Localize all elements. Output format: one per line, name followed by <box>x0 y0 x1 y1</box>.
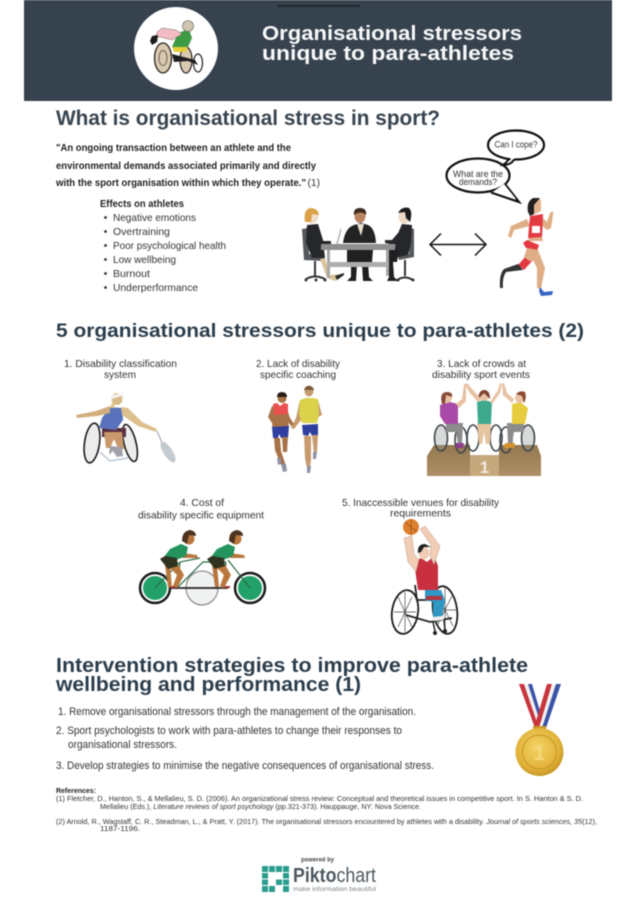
effects on athletes list: Underperformance <box>113 282 198 294</box>
label: 1. Disability classification <box>64 358 177 370</box>
stressor 1 <box>64 358 178 465</box>
effects on athletes list <box>100 198 226 294</box>
right person <box>385 208 414 282</box>
icon: gold medal <box>516 684 564 776</box>
header banner <box>24 0 612 101</box>
references: References: <box>56 786 96 795</box>
heading: intervention strategies <box>55 655 528 696</box>
heading: what is organisational stress: What is organisational stress in sport? <box>56 107 440 130</box>
label <box>256 358 341 381</box>
table <box>321 244 395 250</box>
label <box>138 497 264 522</box>
piktochart footer logo: make information beautiful <box>293 886 377 893</box>
illustration: para-athlete runner <box>500 198 553 296</box>
effects on athletes list: Effects on athletes <box>100 198 184 210</box>
icon: wheelchair racer in white circle <box>134 7 218 90</box>
centre person <box>343 208 376 281</box>
bubble: can I cope: Can I cope? <box>494 140 538 150</box>
label: system <box>104 369 136 381</box>
heading: intervention strategies: wellbeing and performance (1) <box>55 674 361 696</box>
references: (1) Fletcher, D., Hanton, S., & Mellalieu, S. D. (2006). An organizational stress review: Conceptual and theoretical issues in competitive sport. In S. Hanton & S. D. <box>56 794 583 803</box>
illustration: tandem bicycle <box>140 530 265 605</box>
label <box>342 497 500 520</box>
label: disability sport events <box>432 369 530 381</box>
label: 4. Cost of <box>180 497 224 509</box>
banner title <box>262 22 522 65</box>
effects on athletes list: Poor psychological health <box>113 240 226 252</box>
strategies list: 3. Develop strategies to minimise the negative consequences of organisational stress. <box>56 760 434 772</box>
references: Mellalieu (Eds.), Literature reviews of sport psychology (pp.321-373). Hauppauge, NY: Nova Science. <box>100 802 421 811</box>
label: 2. Lack of disability <box>256 358 341 370</box>
effects on athletes list: Low wellbeing <box>113 254 176 266</box>
effects on athletes list: Overtraining <box>113 226 170 238</box>
speech bubbles <box>446 130 544 202</box>
piktochart footer logo: Piktochart <box>293 865 376 887</box>
illustration: athletes on podium: 1 <box>480 458 489 477</box>
definition quote: with the sport organisation within which they operate." <box>55 177 306 189</box>
heading: intervention strategies: Intervention strategies to improve para-athlete <box>56 655 528 677</box>
rider 2 <box>207 530 245 588</box>
bubble: what are the demands <box>446 158 519 202</box>
stressor 2 <box>256 358 341 473</box>
strategies list: organisational stressors. <box>68 739 177 751</box>
effects on athletes list: Negative emotions <box>113 212 196 224</box>
illustration: wheelchair tennis <box>76 392 178 465</box>
label: 5. Inaccessible venues for disability <box>342 497 500 509</box>
piktochart footer logo: powered by <box>301 856 334 864</box>
definition quote: "An ongoing transaction between an athlete and the <box>56 142 291 154</box>
stressor 3 <box>427 358 541 477</box>
references <box>56 786 597 833</box>
banner title: Organisational stressors <box>262 22 522 45</box>
stressor 4 <box>138 497 265 605</box>
bubble: what are the demands: What are the <box>453 169 503 179</box>
strategies list <box>56 706 434 772</box>
label <box>64 358 177 381</box>
stressor 5 <box>342 497 500 636</box>
illustration: wheelchair basketball <box>389 519 460 636</box>
heading: five stressors: 5 organisational stressors unique to para-athletes (2) <box>56 320 584 342</box>
label: disability specific equipment <box>138 510 264 522</box>
label: requirements <box>390 508 451 520</box>
references: (2) Arnold, R., Wagstaff, C. R., Steadman, L., & Pratt, Y. (2017). The organisational stressors encountered by athletes with a disability. Journal of sports sciences, 35(12), <box>56 817 597 826</box>
definition quote: (1) <box>308 177 320 189</box>
label: specific coaching <box>260 369 336 381</box>
references: 1187-1196. <box>100 824 140 833</box>
double-headed arrow <box>430 234 486 256</box>
illustration: guided runners <box>268 386 322 473</box>
rider 1 <box>160 530 198 588</box>
illustration: business meeting <box>302 208 414 282</box>
strategies list: 2. Sport psychologists to work with para-athletes to change their responses to <box>56 725 402 737</box>
definition quote <box>55 142 320 189</box>
strategies list: 1. Remove organisational stressors through the management of the organisation. <box>58 706 416 718</box>
label <box>432 358 530 381</box>
definition quote: environmental demands associated primarily and directly <box>56 160 316 172</box>
icon: gold medal: 1 <box>534 742 546 765</box>
bubble: what are the demands: demands? <box>459 177 497 187</box>
label: 3. Lack of crowds at <box>437 358 526 370</box>
piktochart footer logo <box>262 856 377 893</box>
effects on athletes list: Burnout <box>113 268 150 280</box>
left person <box>302 208 344 282</box>
banner title: unique to para-athletes <box>262 42 514 65</box>
